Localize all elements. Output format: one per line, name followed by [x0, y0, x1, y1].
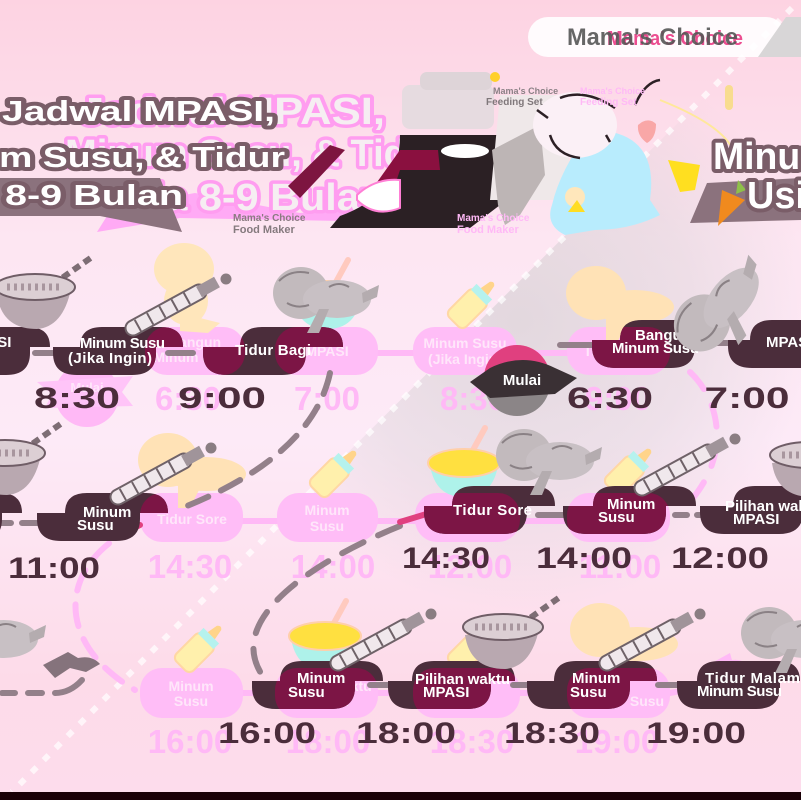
time labels: pink layer: 18:00 — [286, 723, 370, 760]
row 1 pills: pink layer: Minum Susu — [153, 349, 237, 365]
title: dark layer: 8-9 Bulan — [5, 180, 183, 212]
product labels: Mama's Choice — [493, 86, 558, 96]
time labels: dark layer: 14:30 — [402, 542, 490, 575]
row 1 labels: dark layer: (Jika Ingin) — [68, 350, 152, 367]
row 1 pills: pink layer: Minum Susu — [423, 335, 507, 351]
row 3 pills: pink layer: Susu — [630, 693, 664, 709]
row 3 labels: dark layer: Pilihan waktu — [415, 671, 510, 688]
row 1 labels: dark layer: Minum Susu — [612, 340, 699, 357]
dashed route: dark layer — [0, 343, 733, 693]
start badge: dark layer: Mulai — [503, 372, 541, 389]
time labels: pink layer: 19:00 — [575, 723, 659, 760]
product: food maker jar — [288, 72, 500, 228]
row 3 labels: dark layer: MPASI — [423, 684, 469, 701]
title: pink layer: Minum Susu, & Tidur — [65, 133, 445, 175]
time labels: dark layer: 11:00 — [8, 552, 100, 585]
time labels: dark layer: 9:00 — [178, 382, 266, 415]
product labels: Feeding Set — [580, 97, 637, 108]
time labels: pink layer: 18:30 — [430, 723, 514, 760]
row 1 labels: dark layer — [0, 327, 801, 367]
product labels: Mama's Choice — [233, 213, 306, 224]
row 1 pills: pink layer — [145, 327, 670, 375]
row 3 labels: dark layer: Tidur Malam — [705, 670, 800, 687]
title: dark layer: Jadwal MPASI, — [2, 96, 275, 128]
time labels: dark layer: 8:30 — [34, 382, 120, 415]
row 3 pills: pink layer: Pilihan waktu — [282, 678, 372, 694]
time labels: pink layer: 16:00 — [148, 723, 232, 760]
dashed route: pink layer — [75, 353, 720, 693]
title: pink layer: Jadwal MPASI, — [80, 91, 385, 133]
row 1 labels: dark layer: Bangun — [635, 327, 691, 344]
product labels: Feeding Set — [486, 97, 543, 108]
title banner: pink layer — [97, 193, 392, 232]
arrow: pink layer — [708, 653, 755, 677]
time labels: pink layer: 14:30 — [148, 548, 232, 585]
row 2 labels: dark layer — [77, 496, 801, 534]
time labels: dark layer: 7:00 — [704, 382, 790, 415]
product labels: Mama's Choice — [457, 213, 530, 224]
row 2 labels: dark layer: Minum — [83, 504, 131, 521]
row 2 labels: dark layer: Susu — [77, 517, 114, 534]
time labels: dark layer: 18:00 — [356, 717, 456, 750]
start badge: pink layer — [37, 363, 133, 427]
row 3 labels: dark layer: Minum Susu — [697, 683, 782, 700]
activity icons: pink layer — [138, 243, 678, 678]
row 1 labels: dark layer: Minum Susu — [80, 335, 165, 352]
row 2 labels: dark layer: Susu — [598, 509, 635, 526]
row 2 labels: dark layer: MPASI — [733, 511, 779, 528]
product labels: Mama's Choice — [580, 86, 645, 96]
row 2 pills: pink layer: Susu — [601, 518, 635, 534]
row 3 labels: dark layer: Minum — [572, 670, 620, 687]
time labels: pink layer — [148, 380, 661, 760]
row 2 pills: pink layer — [140, 493, 670, 542]
time labels: pink layer: 7:00 — [294, 380, 360, 417]
dark pills — [0, 320, 801, 709]
product labels: Food Maker — [233, 224, 295, 236]
logo pill — [528, 17, 801, 57]
row 3 labels: dark layer — [288, 670, 800, 701]
row 2 pills: pink layer: Minum — [304, 502, 350, 518]
time labels: dark layer: 12:00 — [671, 542, 769, 575]
time labels: pink layer: 9:00 — [585, 380, 651, 417]
time labels: dark layer: 19:00 — [646, 717, 746, 750]
time labels: dark layer: 6:30 — [567, 382, 653, 415]
pill overlap: crimson where layers cross — [140, 327, 670, 718]
row 3 pills: pink layer: Susu — [174, 693, 208, 709]
product labels — [233, 86, 645, 236]
title banner: dark layer — [0, 178, 801, 232]
row 3 labels: dark layer: Susu — [570, 684, 607, 701]
row 1 pills: pink layer: (Jika Ingin) — [428, 351, 502, 367]
arrow: dark layer — [43, 652, 100, 678]
logo pill: Mama's Choice — [567, 24, 738, 51]
row 3 pills: pink layer — [140, 668, 670, 718]
time labels: pink layer: 11:00 — [579, 548, 661, 585]
crossing route: crimson overlap — [120, 512, 556, 693]
bottom bar — [0, 792, 801, 800]
row 2 labels: dark layer: Tidur Sore — [453, 502, 532, 519]
product labels: Food Maker — [457, 224, 519, 236]
row 3 labels: dark layer: Susu — [288, 684, 325, 701]
row 2 pills: pink layer: Tidur Sore — [157, 511, 227, 527]
row 3 pills: pink layer: Susu — [450, 693, 484, 709]
row 3 pills: pink layer: Minum — [444, 678, 490, 694]
time labels: pink layer: 14:00 — [291, 548, 375, 585]
row 2 labels: dark layer: Minum — [607, 496, 655, 513]
time labels: dark layer: 14:00 — [536, 542, 632, 575]
activity icons: dark layer — [0, 243, 801, 673]
logo pill: Mama's Choice — [607, 28, 743, 50]
product: feeding set and baby illustration — [490, 80, 735, 235]
row 3 pills: pink layer: Minum — [168, 678, 214, 694]
row 1 pills: pink layer: Bangun — [169, 334, 221, 350]
row 2 pills: pink layer: Minum — [595, 502, 641, 518]
icon: carrot — [718, 180, 746, 226]
row 1 pills: pink layer: MPASI — [305, 343, 349, 359]
time labels: dark layer — [8, 382, 790, 750]
time labels: pink layer: 12:00 — [428, 548, 512, 585]
start badge: pink layer: Mulai — [70, 380, 104, 395]
title: dark layer — [0, 96, 801, 217]
time labels: pink layer: 8:30 — [440, 380, 506, 417]
title: pink layer — [65, 91, 445, 219]
row 1 labels: dark layer: Tidur Bagi — [235, 342, 311, 359]
row 2 pills: pink layer: MPASI — [445, 516, 489, 532]
time labels: dark layer: 18:30 — [504, 717, 600, 750]
row 3 pills: pink layer: MPASI — [305, 693, 349, 709]
start badge: dark layer — [470, 345, 577, 416]
time labels: pink layer: 6:30 — [155, 380, 221, 417]
row 1 pills: pink layer: Tidur Bagi — [584, 343, 652, 359]
title: pink layer: Usia 8-9 Bulan — [100, 177, 385, 219]
row 2 pills: pink layer: Susu — [310, 518, 344, 534]
row 3 labels: dark layer: Minum — [297, 670, 345, 687]
time labels: dark layer: 16:00 — [218, 717, 316, 750]
